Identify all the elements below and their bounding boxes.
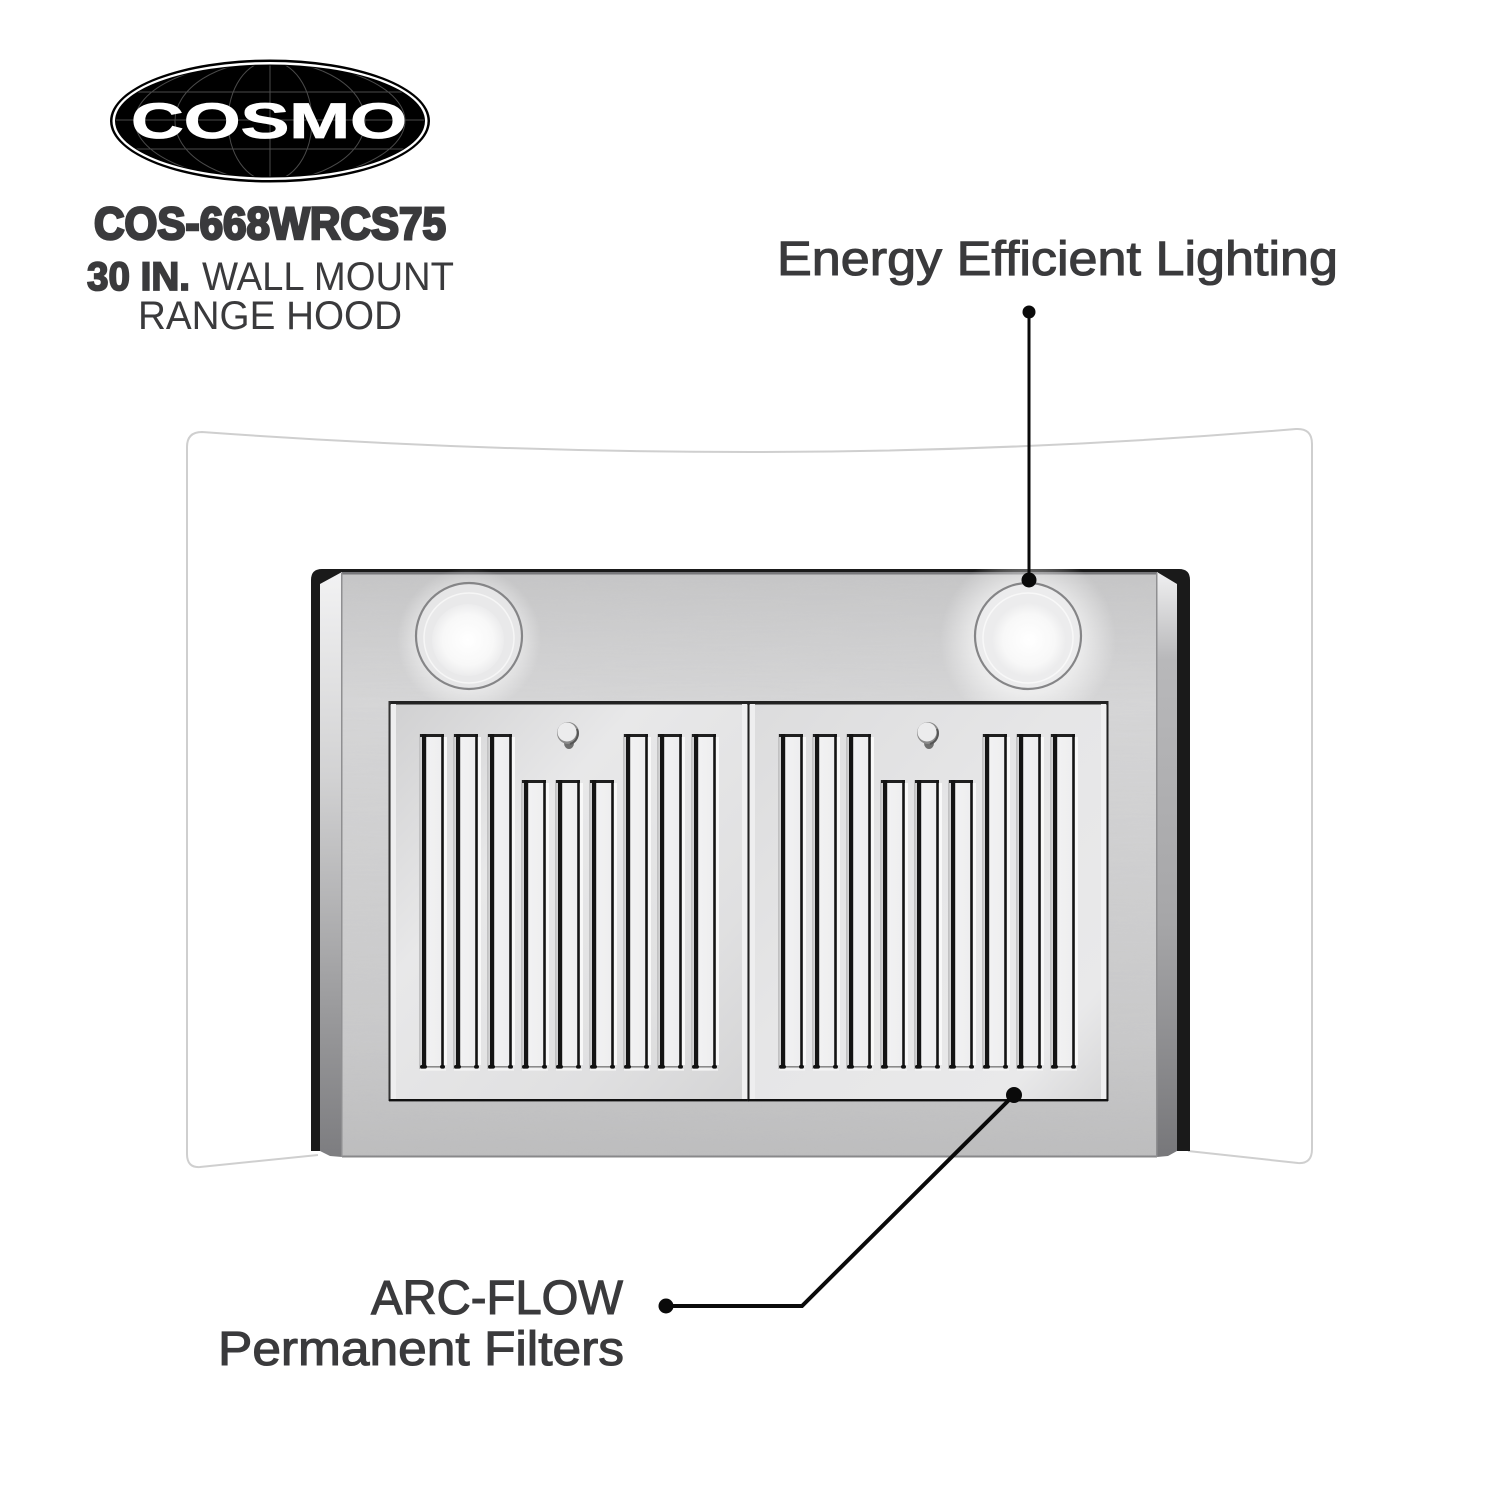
callout line: lighting: [1022, 306, 1036, 588]
model number: COS-668WRCS75: [94, 198, 446, 249]
product description: RANGE HOOD: [138, 294, 402, 338]
filter: right panel: [748, 701, 1108, 1101]
logo: COSMO oval: COSMO: [131, 93, 407, 149]
logo: COSMO oval: [100, 60, 440, 182]
heading: ARC-FLOW Permanent Filters: Permanent Filters: [218, 1323, 624, 1376]
product description: [87, 255, 454, 338]
filter handle left: [557, 722, 579, 749]
range hood body: [311, 552, 1190, 1158]
filter: left panel: [388, 701, 749, 1101]
hood: front plate: [342, 573, 1157, 1157]
heading: ARC-FLOW Permanent Filters: [218, 1272, 624, 1376]
heading: Energy Efficient Lighting: Energy Efficient Lighting: [777, 233, 1338, 286]
product description: 30 IN.: [87, 255, 190, 299]
callout line: filters: [658, 1087, 1022, 1314]
hood: left side bevel: [320, 572, 342, 1157]
hood: right side bevel: [1157, 572, 1177, 1157]
hood: black back edge: [311, 569, 1190, 1151]
infographic canvas: [86, 60, 1336, 1366]
filter handle right: [917, 722, 939, 749]
glass canopy outline: [187, 429, 1312, 1167]
light glow left: [397, 568, 541, 712]
light: right lamp: [975, 583, 1081, 689]
heading: ARC-FLOW Permanent Filters: ARC-FLOW: [371, 1272, 624, 1325]
light glow right: [940, 552, 1116, 728]
product description: WALL MOUNT: [202, 255, 454, 299]
light: left lamp: [416, 583, 522, 689]
